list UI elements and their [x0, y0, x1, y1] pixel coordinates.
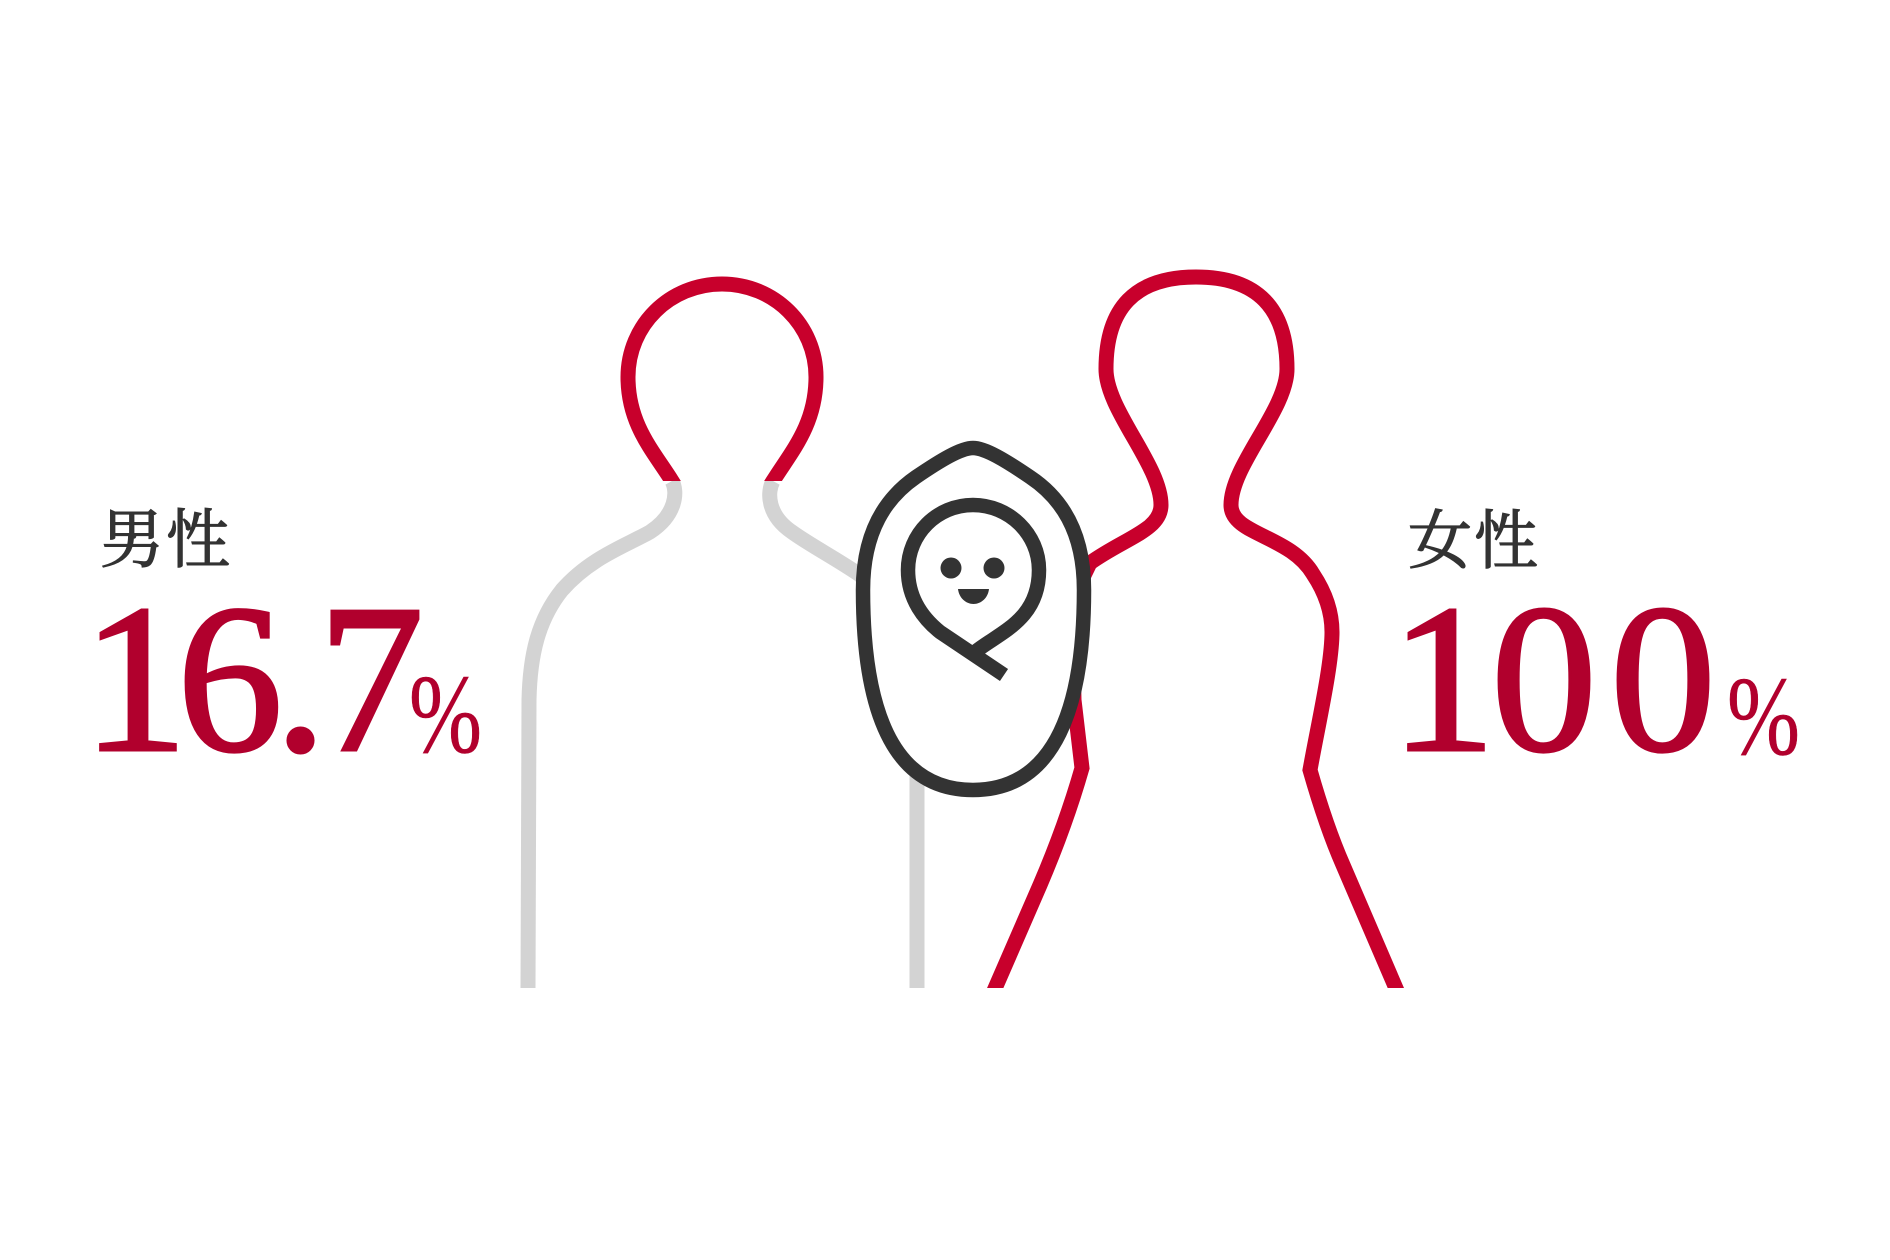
value: male 16.7%: 7 — [318, 561, 424, 796]
value: female 100%: % — [1727, 655, 1800, 779]
value: male 16.7%: % — [409, 653, 482, 777]
value: female 100%: 0 — [1491, 561, 1597, 796]
value: male 16.7%: . — [274, 561, 327, 796]
baby head outline — [908, 505, 1039, 675]
value: female 100% — [1390, 561, 1800, 796]
icon: swaddled baby — [863, 448, 1084, 790]
label: female: 女性 — [1408, 506, 1540, 577]
baby wrap outline — [863, 448, 1084, 790]
value: male 16.7% — [82, 561, 482, 796]
baby mouth — [958, 589, 989, 604]
label: male: 男性 — [100, 505, 232, 576]
baby right eye — [984, 558, 1004, 578]
value: female 100%: 0 — [1610, 561, 1716, 796]
infographic canvas — [99, 270, 1798, 988]
value: male 16.7%: 1 — [82, 561, 188, 796]
baby left eye — [940, 558, 962, 578]
icon: woman outline — [990, 277, 1401, 1000]
value: male 16.7%: 6 — [177, 561, 283, 796]
icon: man outline — [528, 284, 917, 988]
value: female 100%: 1 — [1390, 561, 1496, 796]
